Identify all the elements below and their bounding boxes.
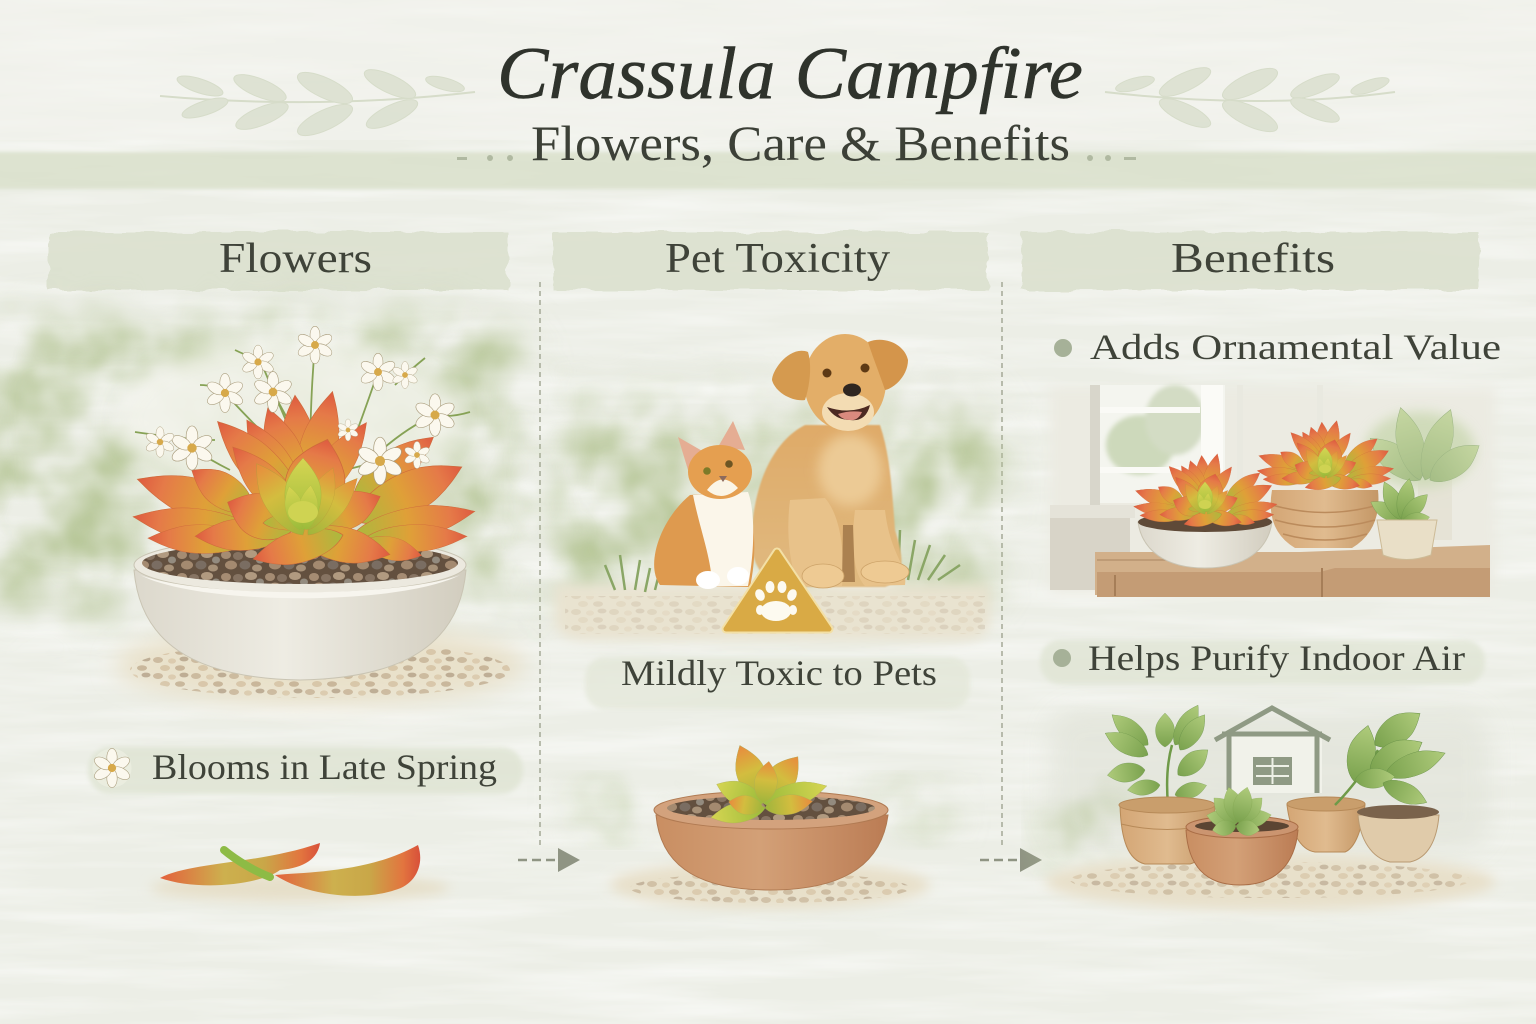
- succulent rosette: [131, 387, 478, 574]
- large-pot succulent: [1256, 419, 1395, 494]
- white bowl: [134, 537, 466, 680]
- ornamental label: Adds Ornamental Value: [1090, 327, 1501, 367]
- flowers heading: Flowers: [219, 236, 372, 282]
- bowl succulent: [1133, 452, 1278, 531]
- purify label: [1040, 638, 1485, 684]
- right leafy plant: [1335, 702, 1449, 811]
- pot: tan left: [1119, 797, 1215, 864]
- pet toxicity heading: [553, 232, 988, 290]
- shrubs beside small pot: [580, 785, 945, 835]
- title: Crassula Campfire: [497, 33, 1083, 115]
- panel: benefits: [1022, 232, 1501, 910]
- terracotta bowl: [654, 791, 888, 890]
- small succulent: [709, 740, 830, 827]
- fallen leaves: [150, 843, 450, 902]
- white bowl: [1138, 512, 1272, 568]
- wooden table: [1095, 545, 1490, 597]
- blooms label: [88, 747, 523, 794]
- flowers heading: [48, 232, 508, 290]
- pet toxicity heading: Pet Toxicity: [665, 236, 890, 282]
- garden backdrop: [0, 320, 530, 610]
- pot: tan back right: [1287, 797, 1365, 852]
- flower stems: [135, 345, 470, 470]
- ornamental room scene: [1050, 385, 1495, 597]
- blooms label: Blooms in Late Spring: [152, 747, 497, 787]
- arrow: pet toxicity to benefits: [980, 848, 1042, 872]
- puppy: [752, 334, 909, 588]
- icon: warning triangle with paw: [726, 552, 829, 629]
- header band: [0, 152, 1536, 189]
- toxicity label: Mildly Toxic to Pets: [621, 653, 937, 693]
- dirt ground: [555, 585, 990, 640]
- icon: flower: [92, 748, 132, 788]
- subtitle dashes: [457, 155, 1136, 161]
- front pot and succulent: [1186, 785, 1298, 885]
- toxicity label: [585, 653, 970, 709]
- purify scene backdrop: [1045, 710, 1495, 910]
- pale shrub and pot: [1362, 404, 1487, 540]
- arrow: flowers to pet toxicity: [518, 848, 580, 872]
- room backdrop: [1050, 388, 1495, 593]
- right laurel decoration: [1105, 62, 1395, 138]
- pot: cream right: [1357, 805, 1439, 862]
- terracotta pot: [1271, 490, 1378, 548]
- left leafy plant: [1101, 701, 1214, 805]
- window: [1050, 385, 1320, 590]
- purify label: Helps Purify Indoor Air: [1088, 638, 1465, 678]
- white flowers: [145, 326, 456, 485]
- kitten: [654, 421, 754, 589]
- subtitle: Flowers, Care & Benefits: [531, 115, 1070, 171]
- panel: flowers: [0, 232, 530, 902]
- icon: house: [1215, 708, 1330, 793]
- benefits heading: [1022, 232, 1479, 290]
- grass: [605, 525, 960, 592]
- ground gravel: [115, 625, 525, 705]
- column dividers: [540, 282, 1002, 845]
- ground gravel: [610, 861, 930, 909]
- garden backdrop: [550, 400, 995, 600]
- benefits heading: Benefits: [1171, 236, 1335, 282]
- panel: pet toxicity: [550, 232, 995, 909]
- center backdrop glow: [120, 340, 460, 500]
- small pot and plant: [1367, 477, 1437, 560]
- left laurel decoration: [160, 64, 475, 142]
